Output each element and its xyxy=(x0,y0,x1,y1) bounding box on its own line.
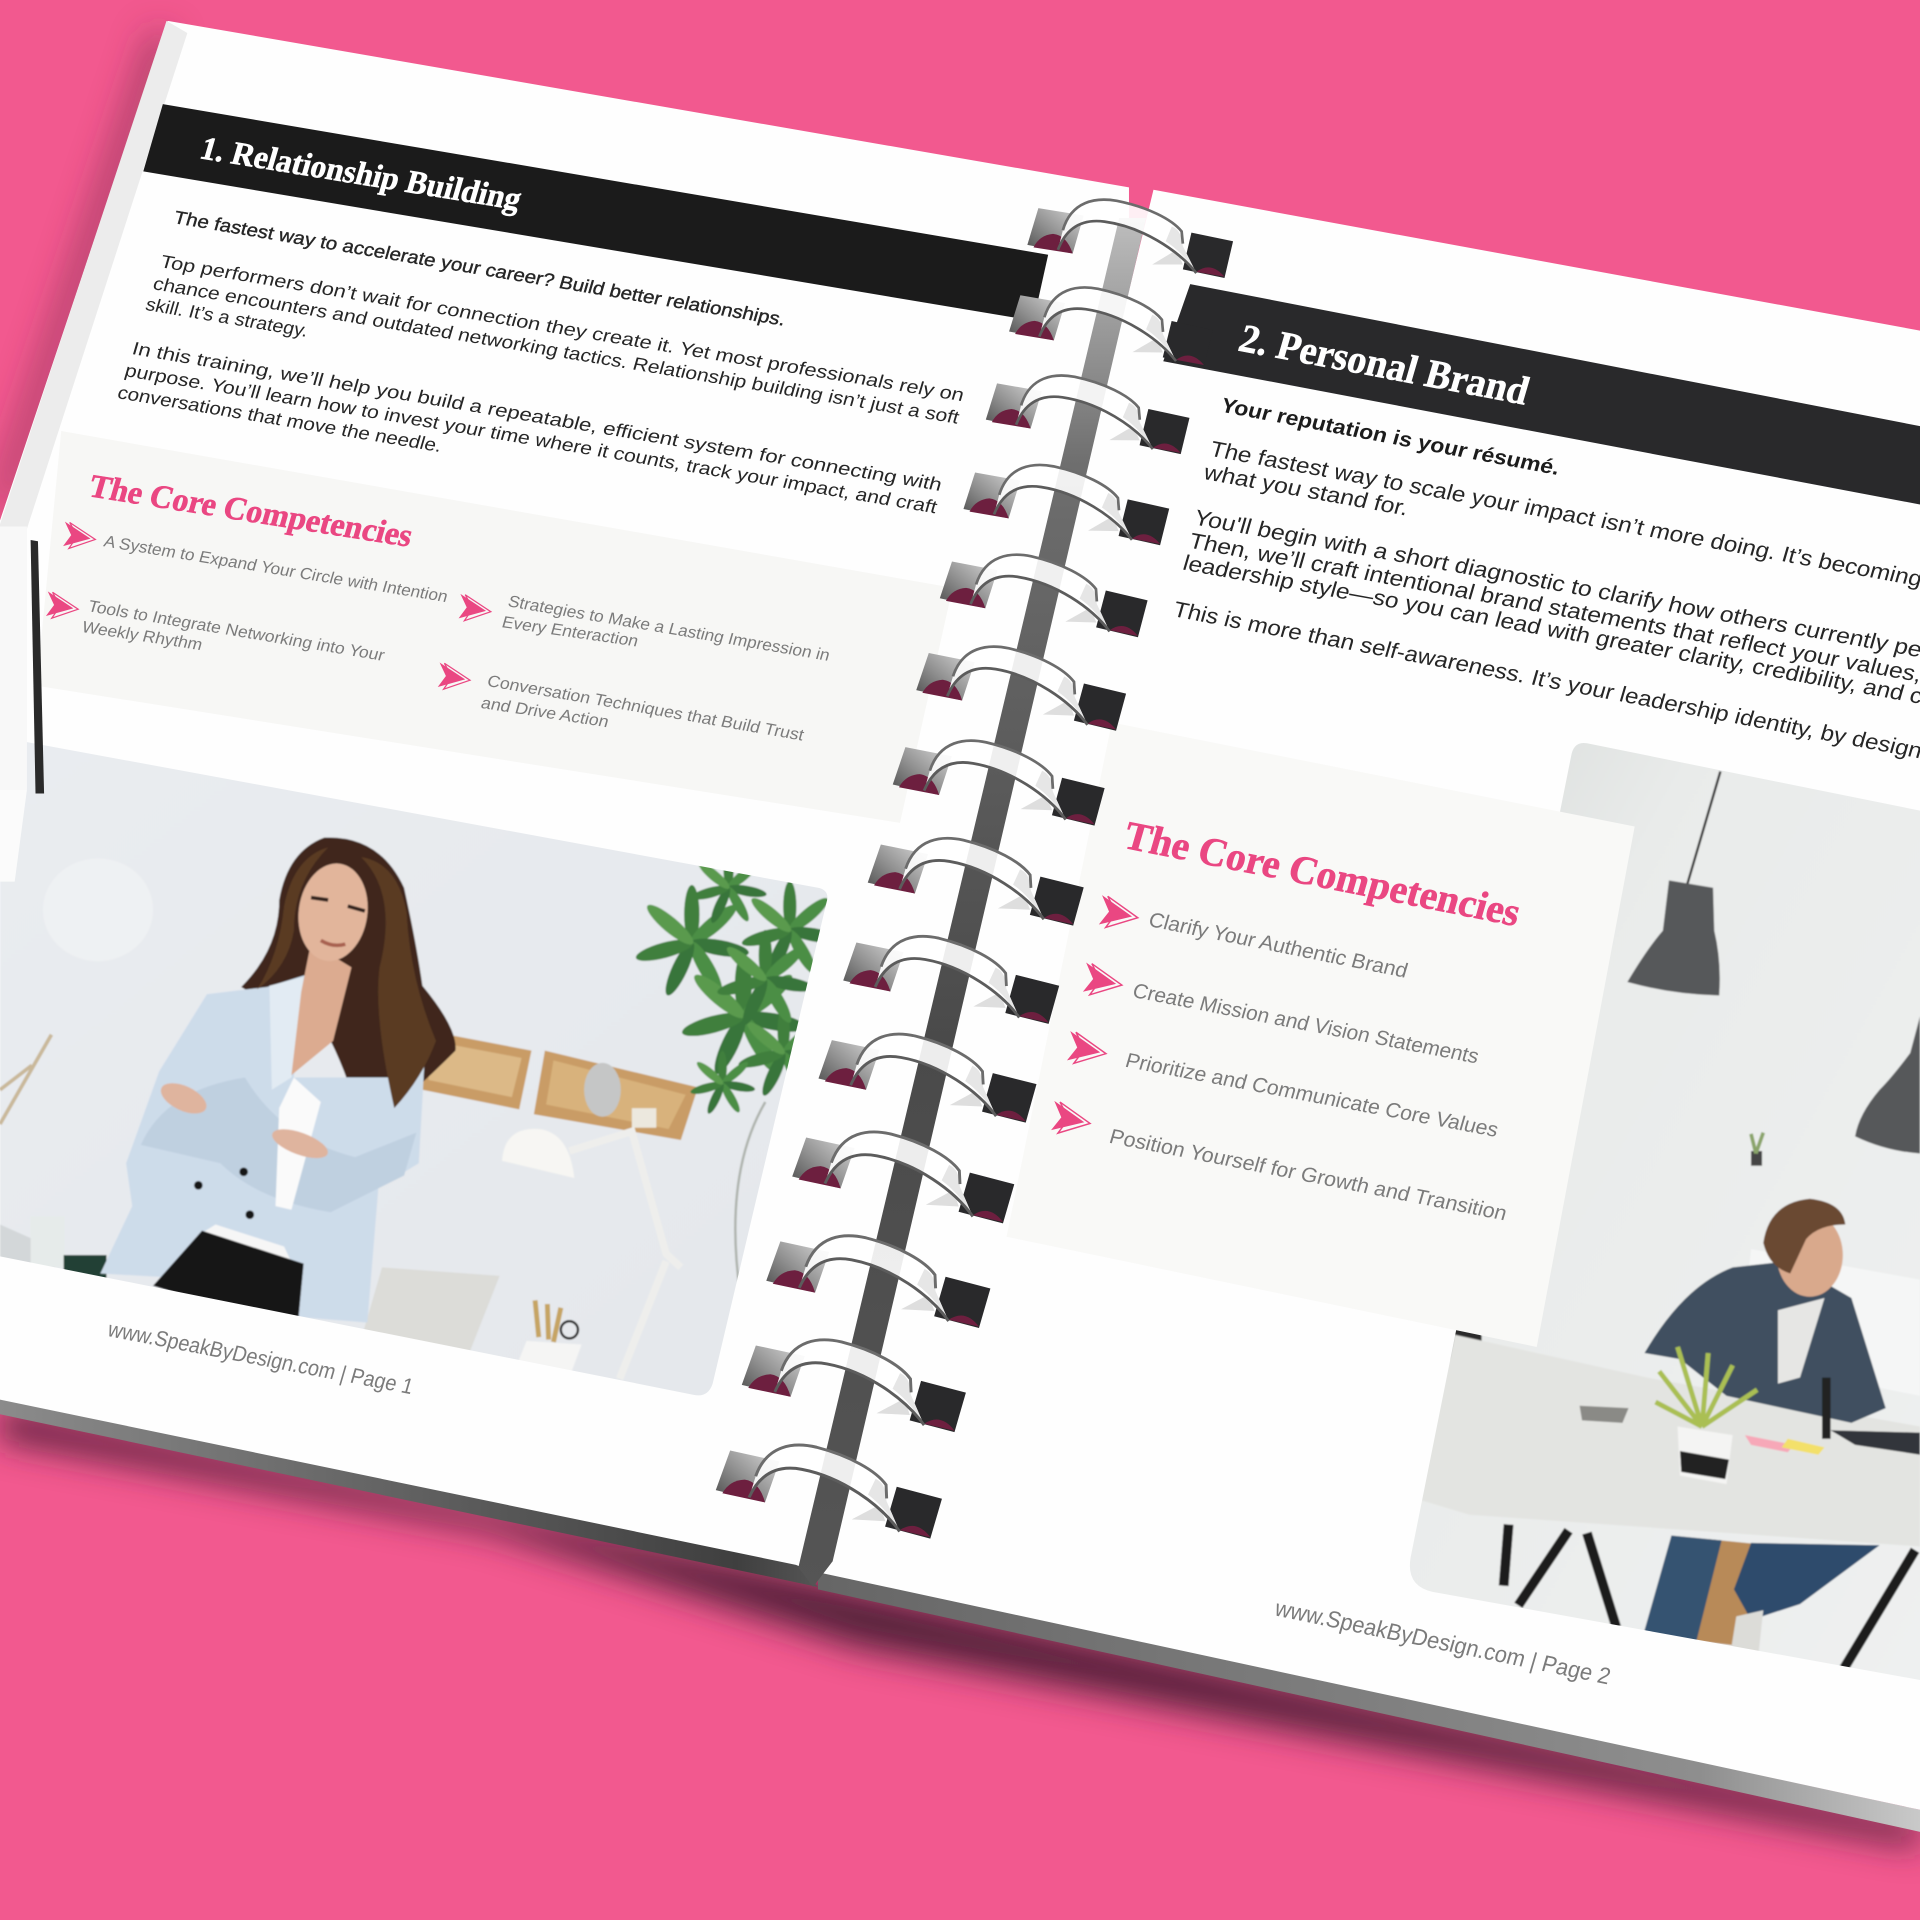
dried plant xyxy=(0,1035,51,1124)
left page header band xyxy=(143,104,1048,321)
right page title: 2. Personal Brand xyxy=(1234,316,1535,413)
competency 3: Every Enteraction xyxy=(500,613,641,650)
desk items xyxy=(0,1225,31,1262)
jeans xyxy=(1643,1536,1722,1643)
neck and face xyxy=(291,943,351,1075)
right page intro text: Your reputation is your résumé. xyxy=(1218,394,1563,480)
competency 1: A System to Expand Your Circle with Intention xyxy=(102,532,450,606)
shelves xyxy=(422,1030,531,1109)
desk items xyxy=(1580,1406,1629,1423)
competency 2: Weekly Rhythm xyxy=(80,617,205,654)
hair front xyxy=(361,857,436,1108)
stool xyxy=(1696,1539,1769,1647)
left page intro text xyxy=(115,207,967,517)
left page sheet xyxy=(0,21,1129,1570)
right page footer: www.SpeakByDesign.com | Page 2 xyxy=(1271,1595,1614,1689)
right page sheet xyxy=(818,190,1920,1810)
left page intro text: purpose. You’ll learn how to invest your time where it counts, track your impact, and craft xyxy=(123,360,940,517)
competency 3: Strategies to Make a Lasting Impression in xyxy=(506,592,832,665)
icon: arrow 2 xyxy=(43,591,80,622)
top xyxy=(276,1078,321,1210)
jacket xyxy=(1644,1261,1886,1423)
right page intro text xyxy=(1170,394,1920,763)
spiral binding rings xyxy=(714,200,1233,1539)
competency 3: Prioritize and Communicate Core Values xyxy=(1123,1049,1501,1142)
photo: man at desk xyxy=(1396,735,1920,1690)
left panel heading: The Core Competencies xyxy=(85,469,417,554)
icon: arrow 4 xyxy=(1048,1101,1093,1139)
left page intro text: In this training, we’ll help you build a repeatable, efficient system for connecting with xyxy=(130,338,945,495)
competency 4: and Drive Action xyxy=(479,693,611,731)
panel: right core competencies xyxy=(1007,722,1635,1347)
left page intro text: skill. It’s a strategy. xyxy=(143,293,311,341)
competency 2: Create Mission and Vision Statements xyxy=(1130,979,1482,1068)
right page header band xyxy=(1163,284,1920,504)
right panel heading: The Core Competencies xyxy=(1119,813,1526,935)
left page title: 1. Relationship Building xyxy=(196,131,526,218)
plant in pot xyxy=(1656,1347,1757,1427)
table xyxy=(1420,1335,1920,1547)
competency 4: Conversation Techniques that Build Trust xyxy=(485,671,807,744)
right page xyxy=(818,190,1920,1810)
spine xyxy=(798,218,1146,1587)
left page intro text: chance encounters and outdated networking tactics. Relationship building isn’t just a soft xyxy=(151,273,962,428)
plant xyxy=(634,885,750,999)
wall plate xyxy=(43,858,153,961)
left page footer: www.SpeakByDesign.com | Page 1 xyxy=(104,1317,416,1399)
competency 1: Clarify Your Authentic Brand xyxy=(1146,908,1410,983)
lamp xyxy=(502,1129,574,1178)
blazer xyxy=(100,975,425,1322)
right page intro text: This is more than self-awareness. It’s your leadership identity, by design xyxy=(1170,597,1920,763)
hands xyxy=(160,1082,207,1114)
shelving xyxy=(1739,1249,1920,1396)
pen xyxy=(0,527,44,882)
left cover strip xyxy=(0,21,187,536)
trousers xyxy=(152,1230,304,1316)
hair back xyxy=(240,836,456,1082)
right page intro text: You'll begin with a short diagnostic to clarify how others currently pe xyxy=(1191,505,1920,662)
lamps xyxy=(1687,771,1720,884)
icon: arrow 3 xyxy=(456,594,493,625)
competency 2: Tools to Integrate Networking into Your xyxy=(86,597,387,665)
cover edges xyxy=(0,1396,1920,1832)
right page intro text: leadership style—so you can lead with greater clarity, credibility, and c xyxy=(1180,550,1920,709)
panel: left core competencies xyxy=(37,431,953,823)
icon: arrow 1 xyxy=(60,522,97,553)
head xyxy=(1777,1213,1843,1297)
pencils and pot xyxy=(535,1300,561,1342)
dark desk corner xyxy=(1445,1329,1482,1359)
left page xyxy=(0,21,1129,1570)
table legs xyxy=(1504,1524,1915,1676)
left page intro text: Top performers don’t wait for connection they create it. Yet most professionals rely on xyxy=(158,251,967,405)
photo: woman in office xyxy=(0,722,857,1408)
right page intro text: what you stand for. xyxy=(1200,459,1412,520)
icon: arrow 4 xyxy=(435,662,472,694)
competency 4: Position Yourself for Growth and Transition xyxy=(1107,1125,1510,1225)
icon: arrow 2 xyxy=(1080,962,1125,1001)
right page intro text: The fastest way to scale your impact isn’t more doing. It’s becoming xyxy=(1207,436,1920,591)
small plant xyxy=(1751,1151,1762,1166)
laptop xyxy=(362,1267,500,1357)
left page intro text: The fastest way to accelerate your career? Build better relationships. xyxy=(172,207,788,330)
icon: arrow 3 xyxy=(1064,1031,1109,1069)
left page intro text: conversations that move the needle. xyxy=(115,382,445,456)
right page intro text: Then, we’ll craft intentional brand statements that reflect your values, xyxy=(1186,528,1920,687)
icon: arrow 1 xyxy=(1096,895,1141,934)
